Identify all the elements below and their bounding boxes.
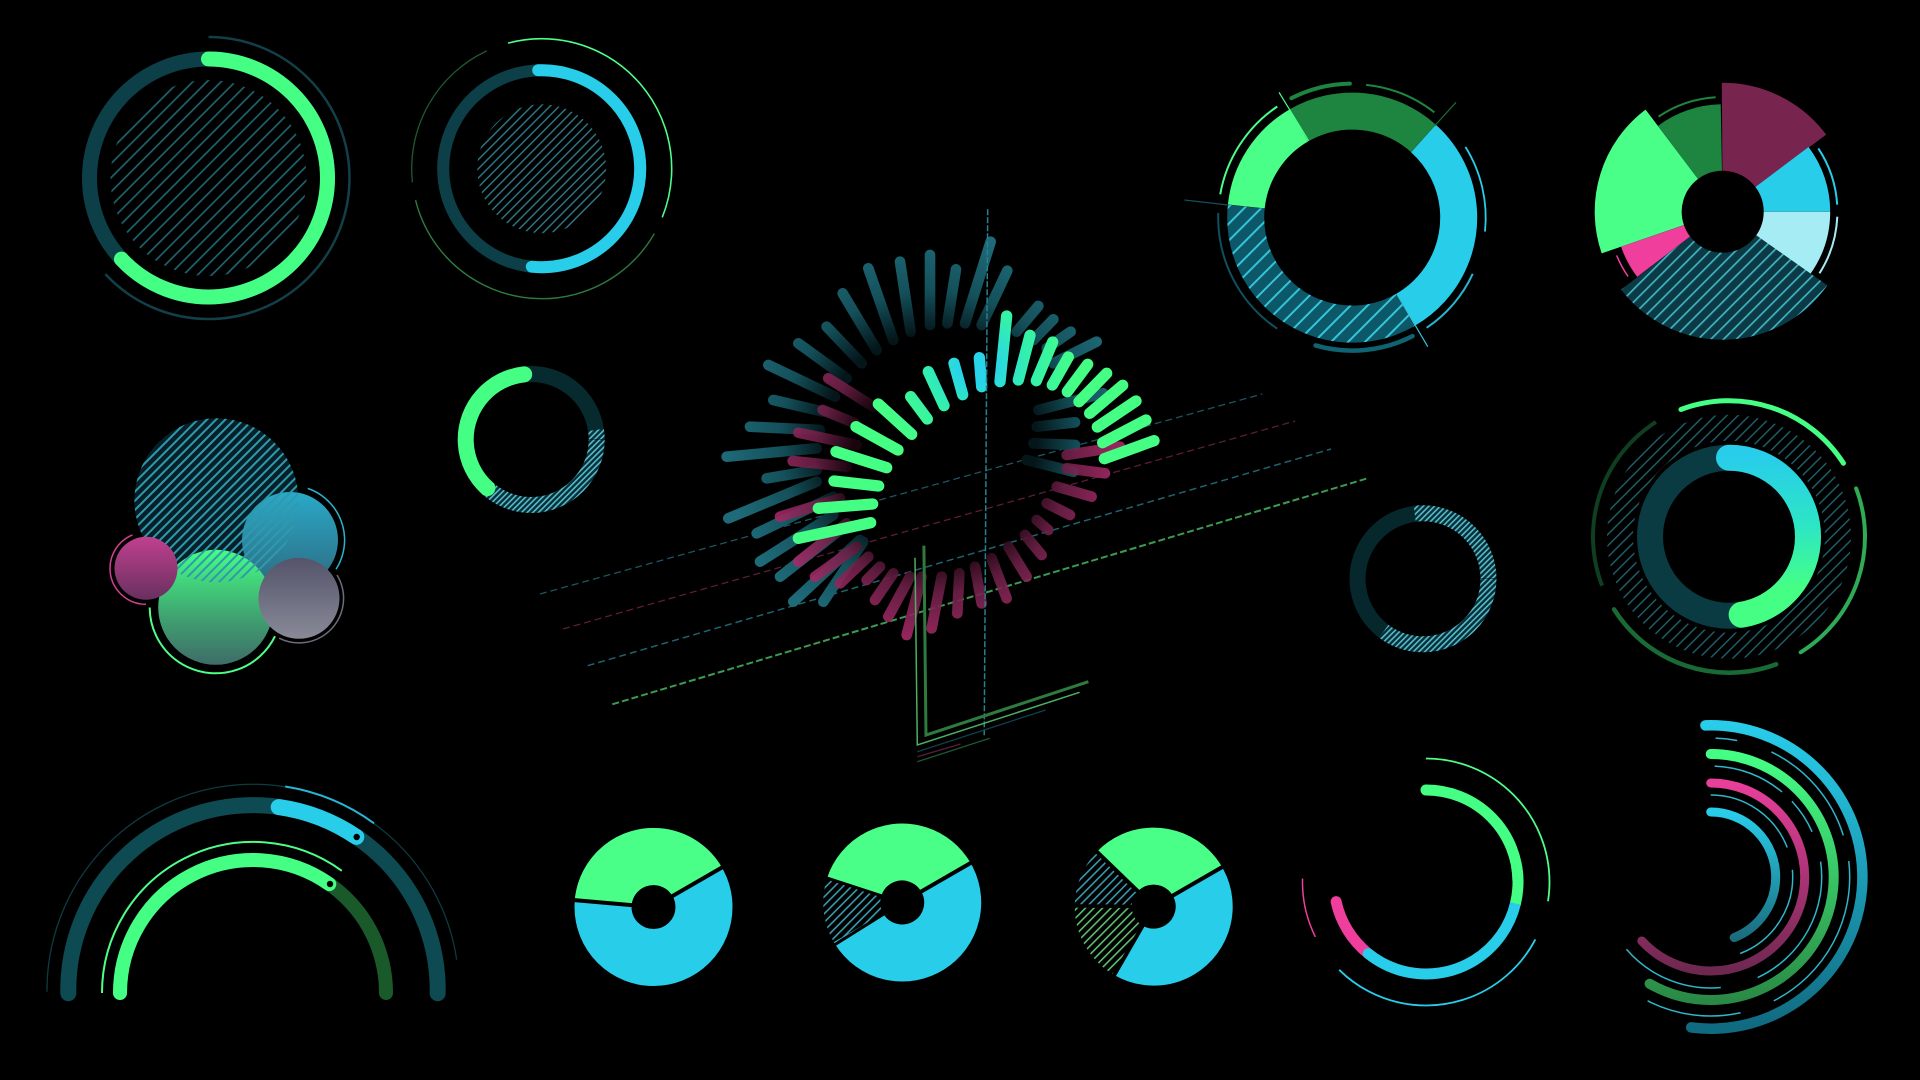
pie donut 3: green, blue and two hatched wedges <box>1069 835 1227 980</box>
perspective guide lines behind radial chart <box>540 394 1368 704</box>
donut segments <box>1202 67 1503 368</box>
thin outer arcs <box>1563 52 1882 371</box>
green bubble <box>158 550 273 665</box>
small ring: green, dark and hatched <box>439 347 624 532</box>
teal outer bars <box>727 242 1103 602</box>
ring gauge: blue progress with hatched core <box>364 0 719 346</box>
green inner bars <box>798 316 1154 538</box>
hatched bubble lines <box>134 418 298 582</box>
inner semicircle track <box>102 842 386 993</box>
pie donut 1: green and blue <box>569 852 727 962</box>
large ring gauge with blue-green gradient and hatched band <box>1553 361 1905 713</box>
bubble outline arcs <box>110 471 360 696</box>
outer semicircle track <box>47 784 457 993</box>
double semicircle gauge <box>47 784 457 993</box>
teal outer arc <box>1554 720 1868 1034</box>
tricolour open ring with outer arcs <box>1259 715 1593 1049</box>
green arc <box>1588 754 1834 1000</box>
concentric spiral arcs <box>1525 691 1896 1063</box>
pie donut 2: green, blue and hatched wedge <box>821 833 976 972</box>
pink mid bars <box>780 378 1120 635</box>
inner teal arc <box>1646 812 1776 942</box>
central radial bar burst <box>727 242 1154 635</box>
overlapping gradient bubbles <box>110 418 360 696</box>
thin accent arcs <box>1525 691 1896 1063</box>
vertical axis and corner guides <box>915 209 1088 762</box>
magenta bubble <box>114 537 178 600</box>
rose segments <box>1615 104 1830 319</box>
outer tick arcs <box>1166 32 1538 404</box>
gray bubble <box>258 558 340 639</box>
rose pie chart with hatched segment <box>1563 52 1882 371</box>
ring gauge: green progress with hatched core <box>68 37 350 319</box>
pink arc <box>1617 783 1805 971</box>
hatched bubble backing <box>134 418 298 582</box>
leader spikes <box>1184 92 1456 347</box>
segmented donut with outer tick arcs <box>1166 32 1538 404</box>
small ring: dark and hatched <box>1332 487 1514 670</box>
blue bubble <box>242 492 338 588</box>
